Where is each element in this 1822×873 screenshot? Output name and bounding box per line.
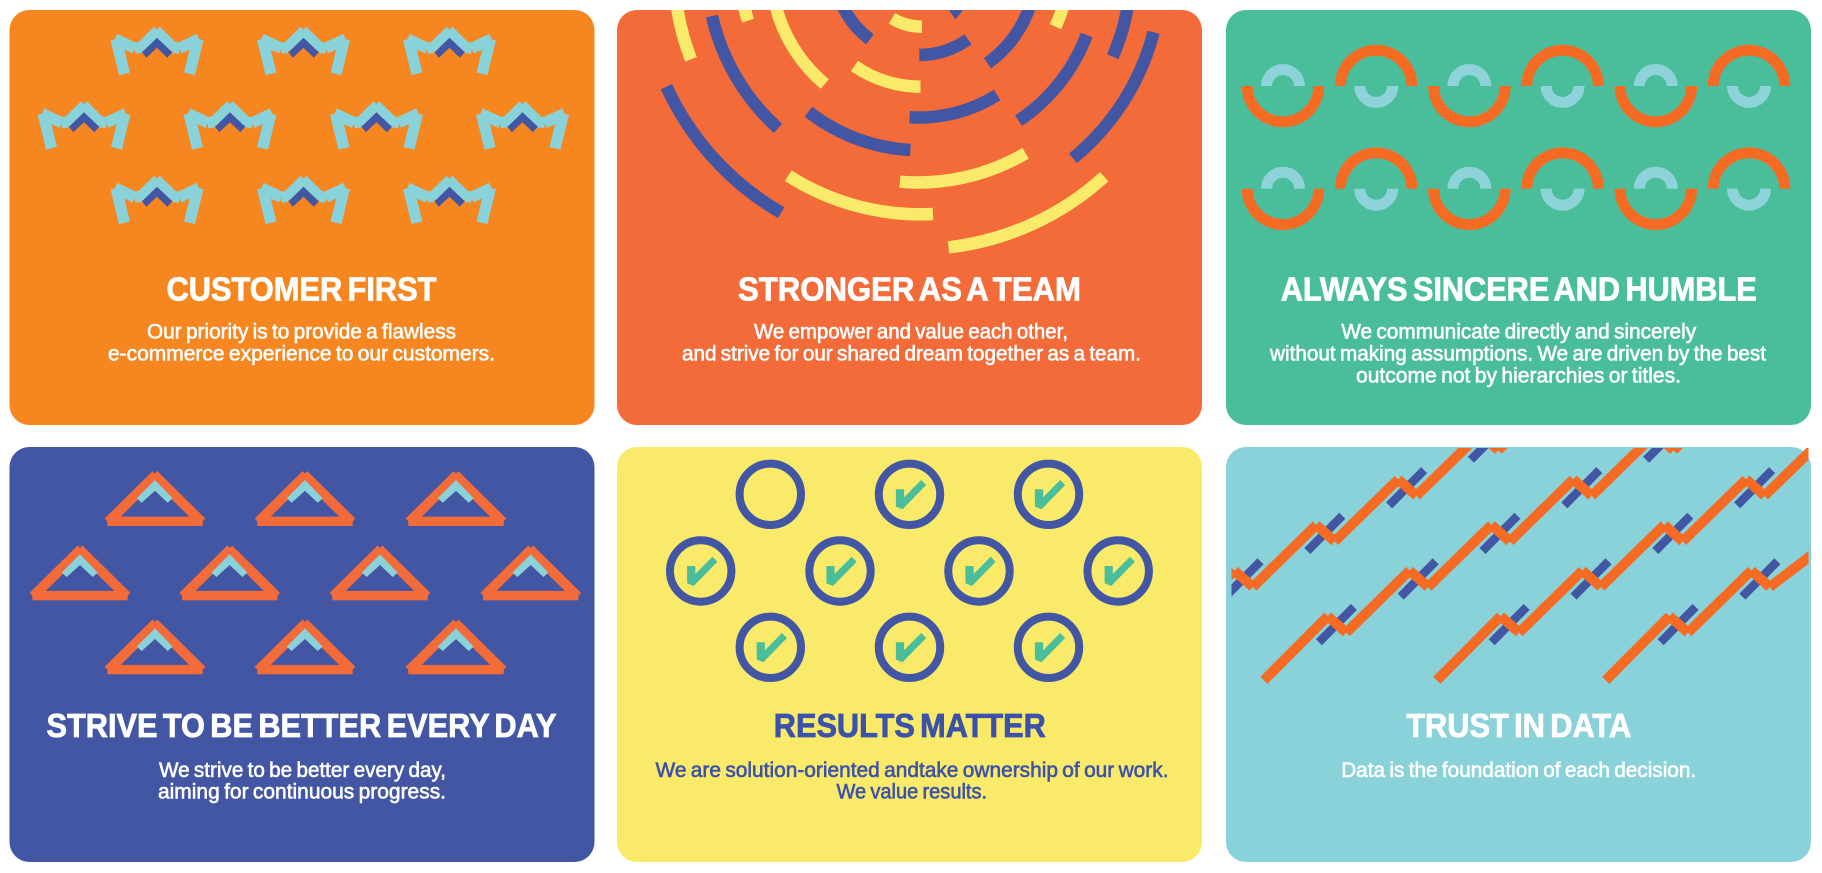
heading: results matter: RESULTS MATTER [774, 708, 1046, 745]
text block: results matter description [656, 758, 1168, 804]
heading: strive to be better every day: STRIVE TO BE BETTER EVERY DAY [46, 708, 556, 745]
text block: stronger as a team description: and strive for our shared dream together as a team. [682, 342, 1141, 366]
icon grid: crowns [42, 31, 565, 223]
text block: always sincere and humble description: without making assumptions. We are driven by the best [1269, 342, 1766, 366]
text block: stronger as a team description: We empower and value each other, [754, 320, 1068, 344]
text block: trust in data description: Data is the foundation of each decision. [1341, 758, 1696, 782]
heading: always sincere and humble: ALWAYS SINCERE AND HUMBLE [1281, 272, 1757, 308]
panel: strive to be better every day [10, 447, 594, 862]
text block: always sincere and humble description: outcome not by hierarchies or titles. [1356, 363, 1681, 387]
text block: strive description [158, 758, 446, 804]
icon grid: semicircle faces [1247, 50, 1785, 225]
icon grid: mountains [32, 475, 578, 674]
text block: always sincere and humble description: We communicate directly and sincerely [1341, 320, 1696, 344]
chart bars: blue dashes [1226, 424, 1777, 642]
text block: results matter description: We are solution-oriented andtake ownership of our work. [656, 758, 1168, 782]
chart lines: orange zigzags [1232, 448, 1808, 684]
chart: rising zigzag lines [1232, 448, 1808, 684]
icon grid: check circles [670, 464, 1149, 678]
heading: customer first: CUSTOMER FIRST [166, 272, 437, 308]
text block: stronger as a team description [682, 320, 1141, 366]
heading: trust in data: TRUST IN DATA [1406, 708, 1631, 745]
text block: always sincere and humble description [1269, 320, 1766, 387]
text block: strive description: aiming for continuous progress. [158, 780, 446, 804]
panel: customer first [10, 10, 594, 425]
graphic: concentric arcs [666, 0, 1154, 247]
panel: stronger as a team [617, 0, 1202, 425]
text block: customer first description: e-commerce experience to our customers. [108, 342, 495, 366]
text block: customer first description [108, 320, 495, 366]
panel: always sincere and humble [1226, 10, 1811, 425]
heading: stronger as a team: STRONGER AS A TEAM [738, 272, 1081, 308]
text block: strive description: We strive to be better every day, [159, 758, 446, 782]
text block: results matter description: We value results. [836, 780, 987, 804]
panel: results matter [617, 447, 1202, 862]
panel: trust in data [1226, 447, 1811, 862]
text block: customer first description: Our priority is to provide a flawless [147, 320, 456, 344]
